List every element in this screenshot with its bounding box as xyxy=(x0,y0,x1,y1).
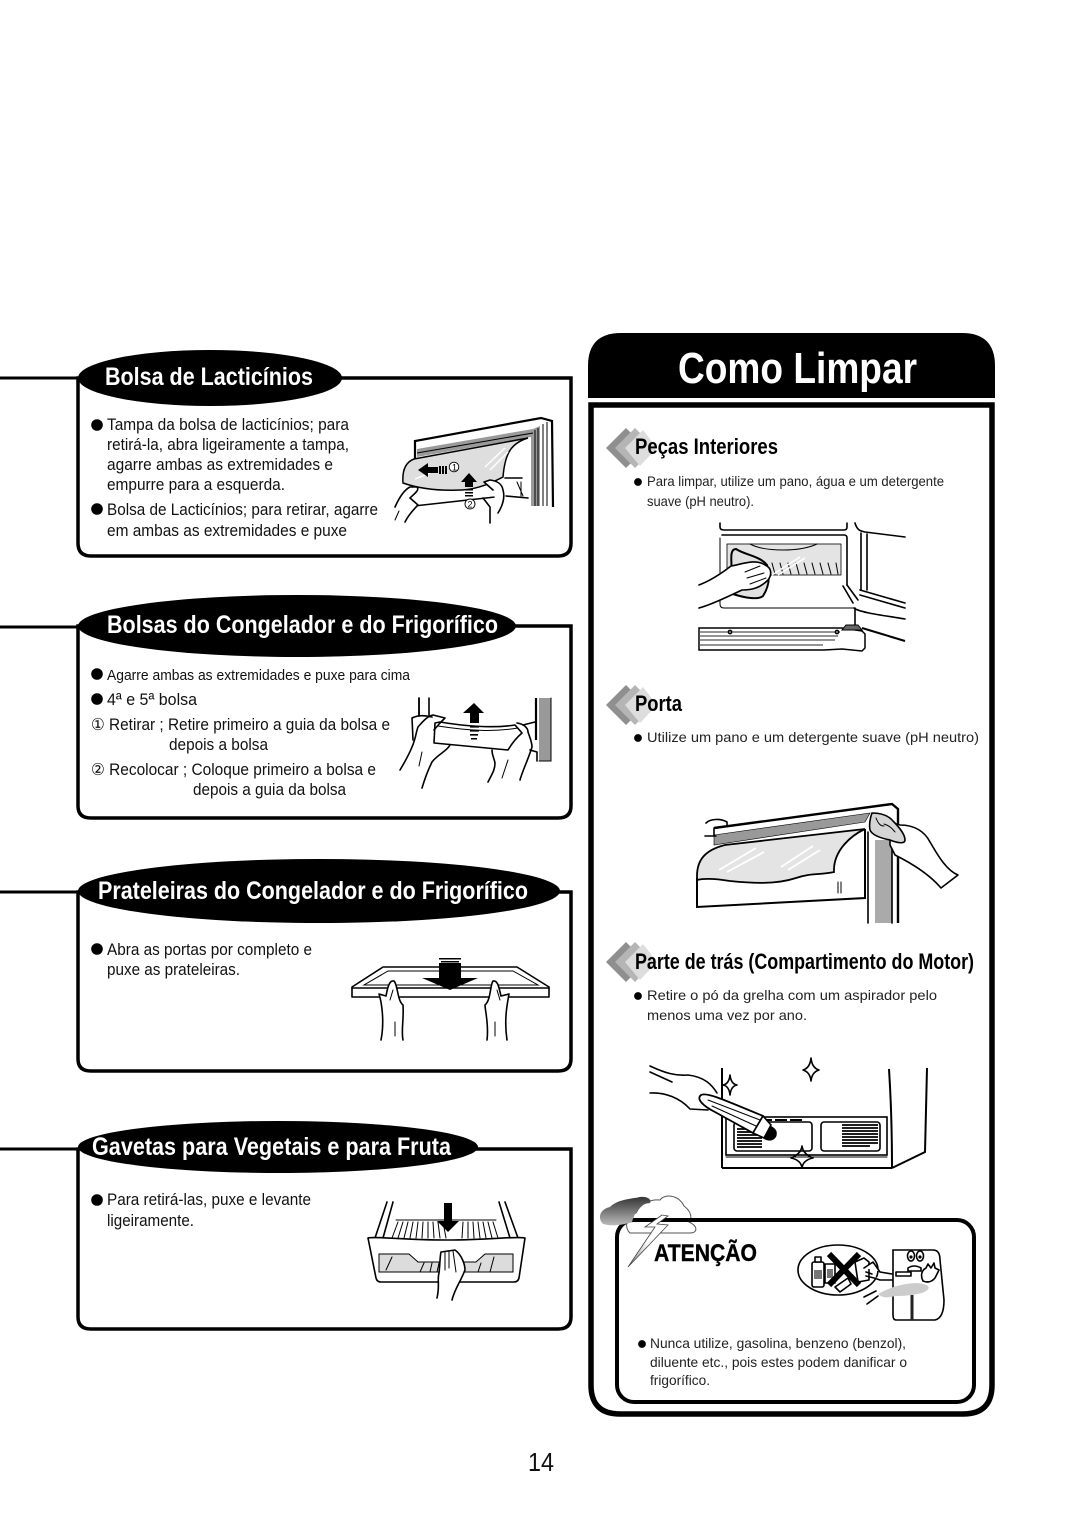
text block: ② Recolocar ; Coloque primeiro a bolsa e xyxy=(91,761,376,779)
text block: empurre para a esquerda. xyxy=(107,476,285,494)
heading pill: Gavetas para Vegetais e para Fruta xyxy=(92,1133,452,1161)
heading pill xyxy=(78,350,342,406)
text block: Nunca utilize, gasolina, benzeno (benzol), xyxy=(650,1335,906,1351)
illustration: lifting the dairy pocket lid: 1 xyxy=(452,462,457,472)
text block xyxy=(91,416,378,540)
heading: Parte de trás (Compartimento do Motor) xyxy=(635,949,974,974)
illustration: wiping the door xyxy=(697,804,958,923)
heading pill xyxy=(78,859,560,923)
text block: depois a bolsa xyxy=(169,736,269,754)
callout: Atenção xyxy=(600,1196,974,1402)
panel: Prateleiras do Congelador e do Frigorífico xyxy=(0,859,571,1071)
text block: Bolsa de Lacticínios; para retirar, agarre xyxy=(107,501,378,519)
title banner: Como Limpar xyxy=(678,344,917,393)
text block: Para retirá-las, puxe e levante xyxy=(107,1191,311,1209)
panel: Bolsas do Congelador e do Frigorífico xyxy=(0,595,571,818)
heading pill: Bolsas do Congelador e do Frigorífico xyxy=(107,611,498,639)
illustration: pulling out a shelf xyxy=(352,958,549,1040)
text block: Tampa da bolsa de lacticínios; para xyxy=(107,416,350,434)
heading: Peças Interiores xyxy=(635,434,778,459)
page number: 14 xyxy=(528,1447,554,1477)
text block: puxe as prateleiras. xyxy=(107,961,240,979)
text block xyxy=(91,941,312,979)
text block: ligeiramente. xyxy=(107,1212,194,1230)
text block: Utilize um pano e um detergente suave (pH neutro) xyxy=(647,729,979,745)
text block: diluente etc., pois estes podem danificar o xyxy=(650,1354,907,1370)
title banner xyxy=(588,333,995,398)
heading pill: Prateleiras do Congelador e do Frigorífico xyxy=(98,877,528,905)
text block: frigorífico. xyxy=(650,1372,710,1388)
panel: Gavetas para Vegetais e para Fruta xyxy=(0,1121,571,1329)
text block xyxy=(91,667,411,799)
illustration: forbidden chemicals and scared fridge xyxy=(798,1245,944,1320)
text block: Agarre ambas as extremidades e puxe para cima xyxy=(107,667,411,684)
icon: grey chevrons xyxy=(606,942,657,982)
section: Porta xyxy=(606,685,979,923)
panel: cleaning frame xyxy=(591,405,992,1414)
panel: Bolsa de Lacticínios xyxy=(0,350,571,556)
illustration: lifting a door bin xyxy=(400,698,551,788)
section: Parte de trás xyxy=(606,942,974,1168)
illustration: lifting the dairy pocket lid: 2 xyxy=(468,500,473,510)
text block: Abra as portas por completo e xyxy=(107,941,312,959)
text block: agarre ambas as extremidades e xyxy=(107,456,333,474)
text block xyxy=(91,1191,311,1230)
text block: suave (pH neutro). xyxy=(647,493,754,509)
illustration: wiping the compartment xyxy=(699,523,905,651)
text block: retirá-la, abra ligeiramente a tampa, xyxy=(107,436,349,454)
text block: depois a guia da bolsa xyxy=(193,781,347,799)
text block: 4ª e 5ª bolsa xyxy=(107,691,198,709)
icon: grey chevrons xyxy=(606,685,657,725)
text block: menos uma vez por ano. xyxy=(647,1007,807,1023)
text block: Retire o pó da grelha com um aspirador pelo xyxy=(647,987,937,1003)
text block xyxy=(634,473,944,509)
heading: Porta xyxy=(635,691,682,716)
heading: ATENÇÃO xyxy=(654,1239,757,1267)
text block: em ambas as extremidades e puxe xyxy=(107,522,347,540)
heading pill xyxy=(78,595,516,657)
section: Peças Interiores xyxy=(606,428,944,651)
illustration: lifting the dairy pocket lid xyxy=(395,418,553,523)
icon: storm cloud with lightning xyxy=(600,1197,668,1267)
icon: grey chevrons xyxy=(606,428,657,468)
text block: ① Retirar ; Retire primeiro a guia da bolsa e xyxy=(91,716,390,734)
text block: Para limpar, utilize um pano, água e um detergente xyxy=(647,473,944,489)
heading pill: Bolsa de Lacticínios xyxy=(105,363,313,391)
illustration: vacuuming the rear grille xyxy=(650,1058,927,1168)
illustration: pulling out a vegetable drawer xyxy=(368,1202,525,1300)
heading pill xyxy=(78,1121,478,1173)
text block xyxy=(638,1335,907,1388)
text block xyxy=(634,987,937,1023)
